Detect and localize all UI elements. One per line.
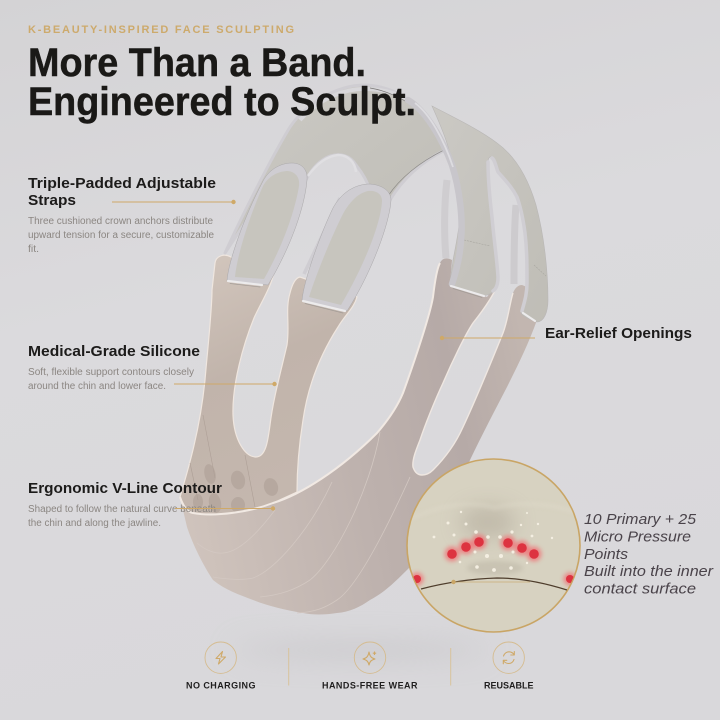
feature: hands-free wear bbox=[322, 642, 418, 690]
inset callout leader bbox=[451, 580, 530, 584]
product: V-line chin band bbox=[180, 85, 548, 614]
callout: medical-grade silicone: around the chin and lower face. bbox=[28, 381, 166, 392]
callout: ergonomic v-line contour: Shaped to follow the natural curve beneath bbox=[28, 504, 216, 515]
title: Engineered to Sculpt. bbox=[28, 80, 416, 124]
callout: triple-padded straps: Triple-Padded Adjustable bbox=[28, 175, 216, 192]
callout: triple-padded straps bbox=[28, 175, 236, 255]
callout: pressure points text: contact surface bbox=[584, 580, 696, 598]
callout: ergonomic v-line contour bbox=[28, 480, 275, 529]
right padded strap with ear-relief window bbox=[432, 106, 548, 322]
feature: hands-free wear: HANDS-FREE WEAR bbox=[322, 680, 418, 690]
title: More Than a Band. bbox=[28, 41, 366, 85]
red primary points bbox=[410, 534, 576, 586]
feature: no charging bbox=[186, 642, 256, 690]
callout: triple-padded straps: Three cushioned crown anchors distribute bbox=[28, 216, 213, 227]
feature: reusable bbox=[484, 642, 534, 690]
eyebrow: K-BEAUTY-INSPIRED FACE SCULPTING bbox=[28, 24, 294, 36]
callout: medical-grade silicone: Medical-Grade Silicone bbox=[28, 343, 200, 360]
icon: lightning bolt bbox=[216, 652, 226, 664]
middle strap bbox=[302, 184, 391, 311]
callout: ear-relief openings: Ear-Relief Openings bbox=[545, 325, 692, 342]
callout: pressure points text: Points bbox=[584, 546, 629, 563]
inner contact nubs bbox=[193, 463, 280, 514]
callout: triple-padded straps: upward tension for a secure, customizable bbox=[28, 230, 214, 241]
callout: medical-grade silicone: Soft, flexible support contours closely bbox=[28, 367, 194, 378]
micro points bbox=[433, 511, 553, 572]
front chin cup and right straps bbox=[180, 258, 537, 614]
feature: no charging: NO CHARGING bbox=[186, 680, 256, 690]
callout: pressure points text: 10 Primary + 25 bbox=[584, 511, 697, 528]
callout: pressure points text bbox=[584, 511, 714, 598]
contact surface seam bbox=[421, 578, 567, 590]
magnified inset: micro pressure points bbox=[407, 459, 582, 632]
callout: triple-padded straps: fit. bbox=[28, 244, 39, 255]
back silicone panel with slot bbox=[180, 255, 357, 514]
silver buckles bbox=[228, 281, 535, 321]
callout: ear-relief openings bbox=[440, 325, 692, 342]
callout: medical-grade silicone bbox=[28, 343, 277, 392]
icon: refresh arrows bbox=[503, 652, 514, 664]
feature: reusable: REUSABLE bbox=[484, 680, 534, 690]
callout: ergonomic v-line contour: the chin and along the jawline. bbox=[28, 518, 161, 529]
callout: pressure points text: Micro Pressure bbox=[584, 528, 691, 546]
chin cup contour lines bbox=[197, 432, 410, 613]
callout: pressure points text: Built into the inner bbox=[584, 563, 714, 580]
crown panel bbox=[225, 85, 445, 253]
callout: ergonomic v-line contour: Ergonomic V-Line Contour bbox=[28, 480, 222, 497]
title bbox=[28, 41, 416, 124]
arch rim bbox=[408, 100, 462, 284]
left strap bbox=[227, 163, 307, 285]
callout: triple-padded straps: Straps bbox=[28, 192, 76, 209]
back strap strips bbox=[445, 180, 447, 258]
inset shading bbox=[407, 504, 582, 575]
icon: sparkle bbox=[363, 652, 376, 665]
